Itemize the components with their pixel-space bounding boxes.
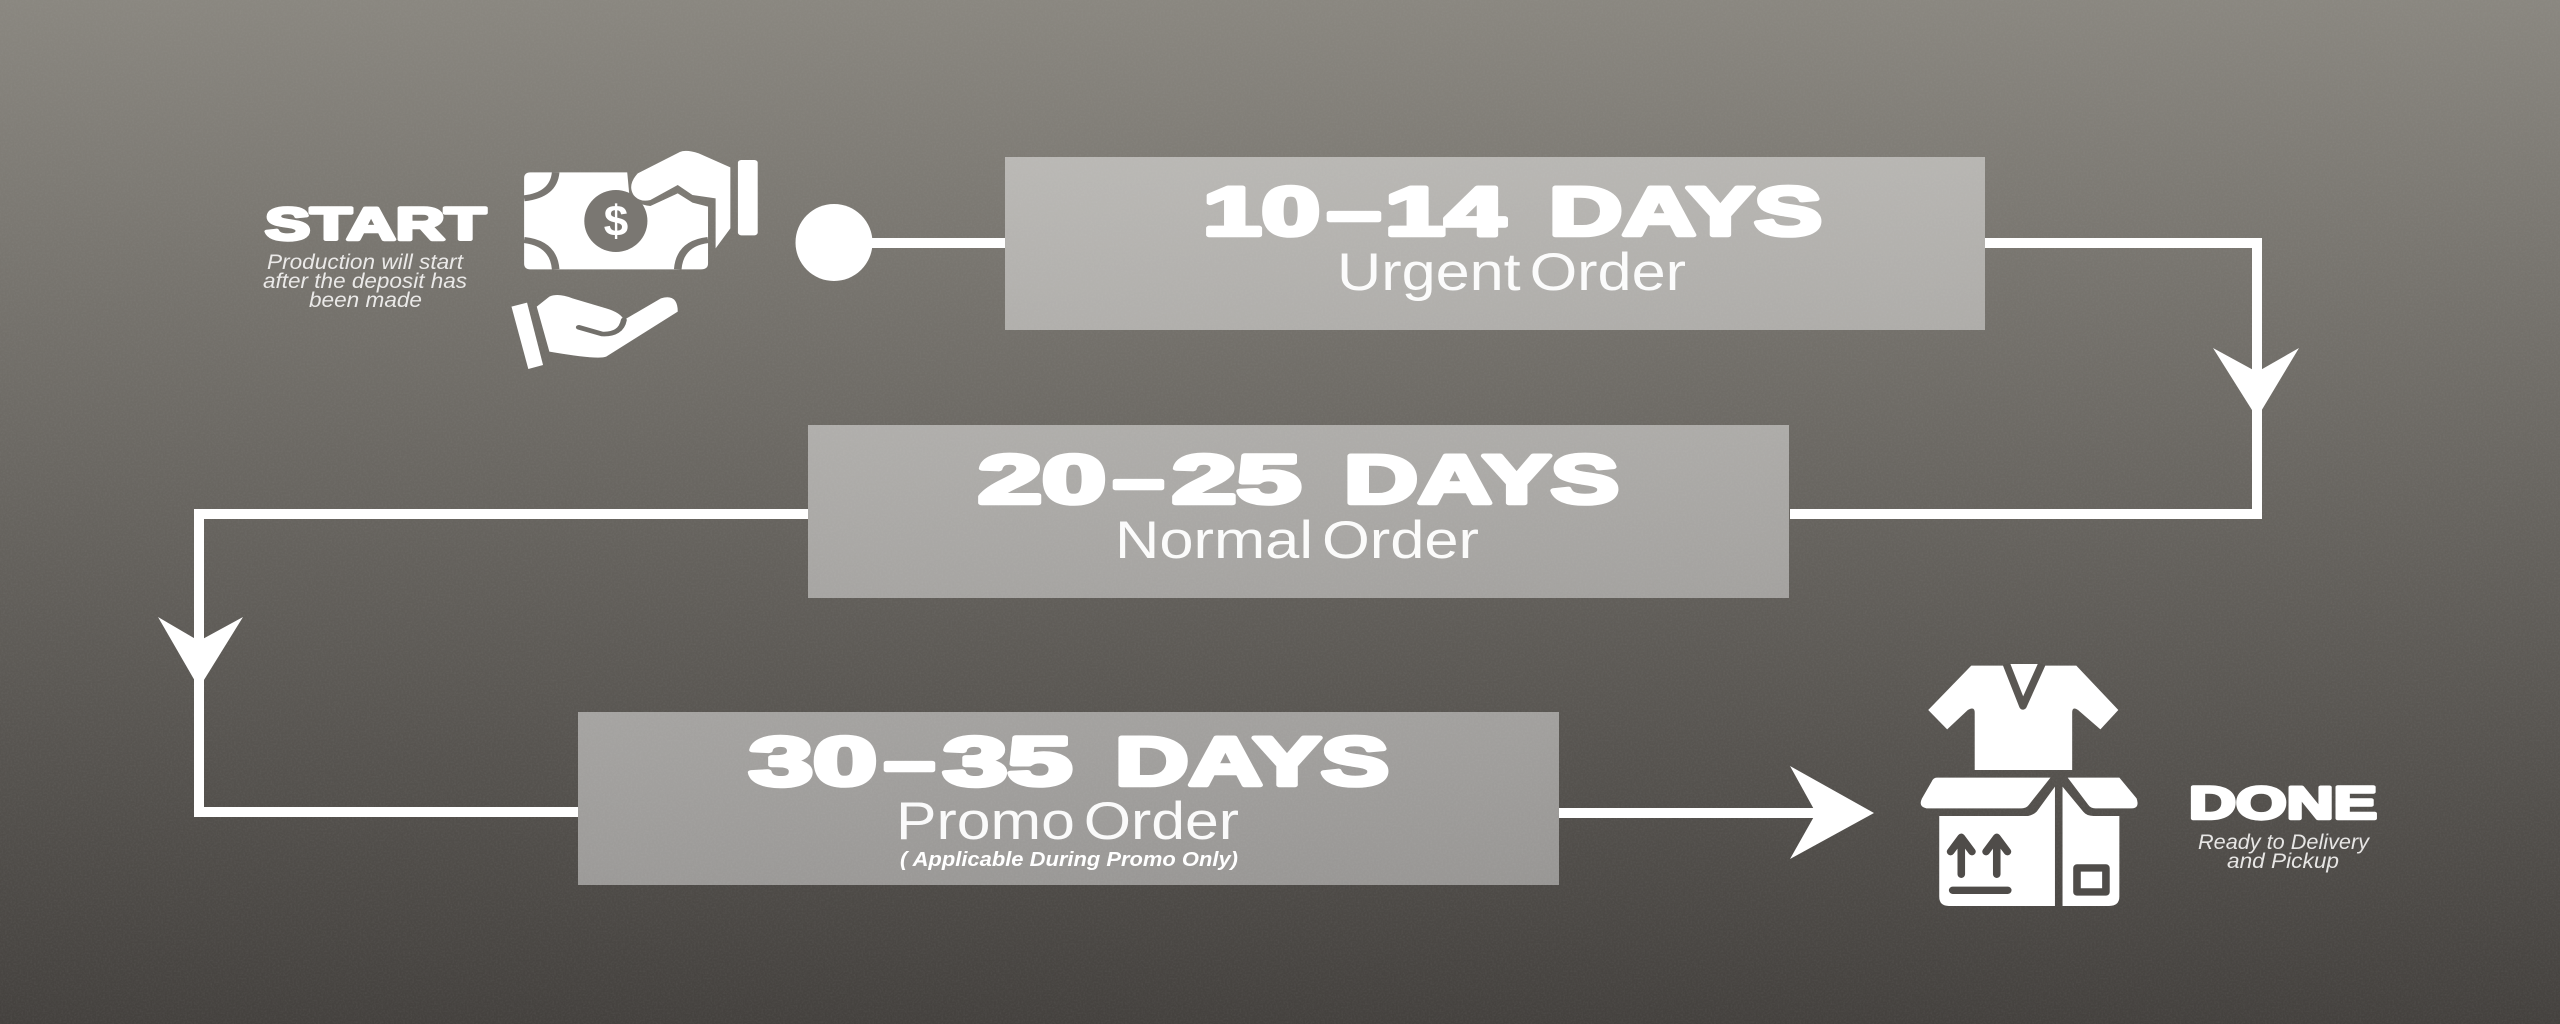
icon: shirt in open box	[1921, 664, 2138, 906]
panel: urgent order	[1005, 157, 1985, 330]
arrow: down left side	[158, 617, 243, 688]
heading: 30-35 days: 30	[749, 723, 877, 800]
heading: 30-35 days: 35	[943, 723, 1072, 800]
heading: 30-35 days: DAYS	[1115, 723, 1389, 800]
arrow: down right side	[2213, 348, 2299, 418]
subheading: normal order: Normal Order	[1115, 511, 1479, 570]
panel: promo order	[578, 712, 1559, 885]
flow connector line	[199, 243, 2257, 813]
start node circle	[796, 204, 872, 281]
heading: 20-25 days: DAYS	[1344, 441, 1619, 518]
heading: 20-25 days: –	[1113, 441, 1164, 518]
heading: 10-14 days: –	[1327, 173, 1381, 250]
description: done	[2198, 831, 2371, 873]
subheading: promo order: Promo Order	[896, 792, 1239, 851]
heading: 30-35 days: –	[884, 723, 935, 800]
subheading: urgent order: Urgent Order	[1337, 243, 1686, 302]
heading: 10-14 days: DAYS	[1549, 173, 1822, 250]
description: start: Production will start	[267, 251, 464, 274]
shirt	[1928, 666, 2118, 770]
heading: 10-14 days: 14	[1385, 173, 1505, 250]
dollar sign: $	[604, 197, 628, 246]
done label	[2189, 778, 2377, 873]
upper hand	[631, 151, 730, 248]
lower hand	[511, 303, 543, 369]
heading: start: START	[265, 198, 486, 250]
heading: 10-14 days: 10	[1203, 173, 1320, 250]
description: done: and Pickup	[2227, 850, 2339, 873]
box flaps	[1921, 778, 2050, 808]
description: done: Ready to Delivery	[2198, 831, 2371, 854]
heading: done: DONE	[2189, 778, 2377, 828]
banknote	[524, 172, 708, 269]
heading: 20-25 days: 20	[978, 441, 1106, 518]
description: start: been made	[309, 289, 422, 312]
arrow: right to done	[1790, 766, 1874, 859]
panel: normal order	[808, 425, 1789, 598]
description: start: after the deposit has	[263, 270, 468, 293]
box body	[1939, 787, 2055, 906]
note: promo only: ( Applicable During Promo Only)	[900, 849, 1238, 871]
icon: money changing hands	[511, 151, 758, 369]
heading: 20-25 days: 25	[1172, 441, 1301, 518]
box markings	[1951, 837, 2106, 892]
description: start	[263, 251, 468, 312]
start label	[263, 198, 486, 312]
